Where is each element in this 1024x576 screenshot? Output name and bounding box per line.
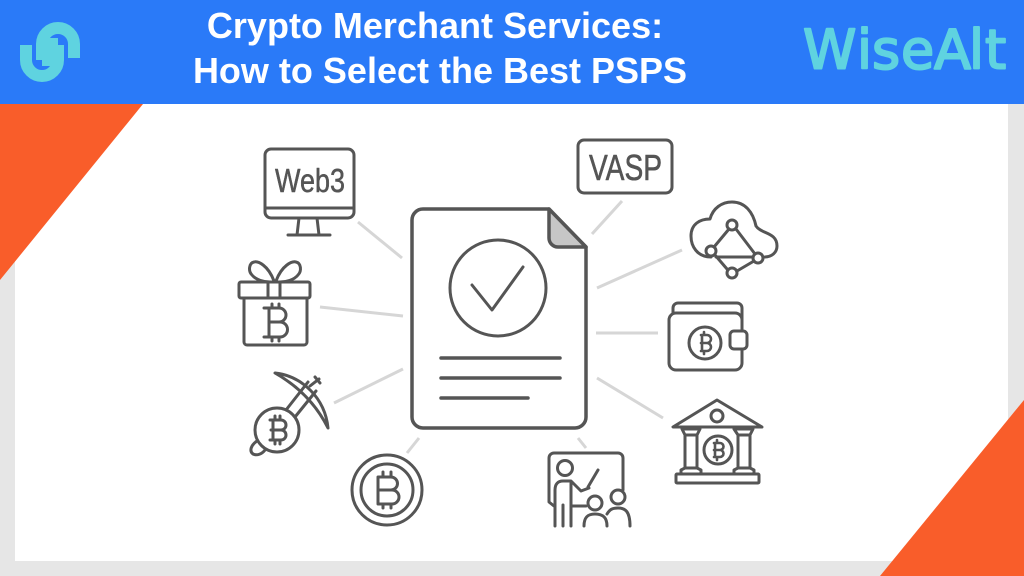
central document icon	[412, 209, 586, 428]
orange corner triangle top left	[0, 104, 143, 280]
bitcoin symbol	[264, 304, 288, 341]
icon: bitcoin bank	[673, 400, 762, 483]
title: Crypto Merchant Services:	[207, 5, 663, 46]
icon: cloud network	[691, 202, 777, 278]
bitcoin symbol	[714, 440, 724, 460]
icon: presenter at board	[549, 453, 630, 526]
icon: bitcoin pickaxe	[251, 373, 328, 455]
Web3 label: Web3	[275, 162, 345, 199]
icon: VASP sign	[578, 140, 672, 193]
VASP label: VASP	[589, 147, 662, 188]
icon: bitcoin coin	[352, 455, 422, 525]
icon: bitcoin gift box	[239, 262, 310, 345]
bitcoin symbol	[270, 416, 286, 444]
logo mark	[26, 28, 74, 76]
brand wordmark: WiseAlt	[803, 18, 1006, 82]
bitcoin symbol	[701, 332, 711, 354]
text lines	[441, 358, 560, 398]
check circle	[450, 240, 546, 336]
title	[193, 5, 687, 91]
header banner	[0, 0, 1024, 104]
folded corner	[549, 209, 586, 247]
title: How to Select the Best PSPS	[193, 50, 687, 91]
icon: bitcoin wallet	[669, 303, 747, 370]
panel: white content area	[15, 104, 1008, 561]
connector lines	[320, 201, 682, 453]
check mark	[472, 267, 523, 310]
bitcoin symbol	[378, 472, 399, 508]
icon: Web3 monitor	[265, 149, 354, 235]
orange corner triangle bottom right	[880, 400, 1024, 576]
